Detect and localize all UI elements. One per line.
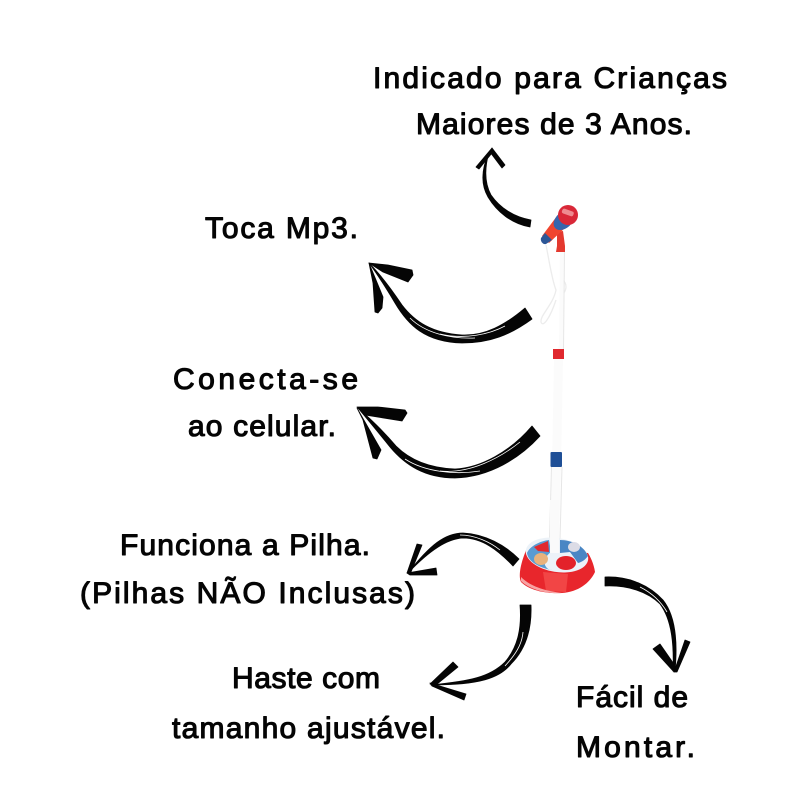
text: age recommendation: Maiores de 3 Anos.: [416, 108, 692, 141]
text: age recommendation: [373, 62, 727, 141]
microphone grip end: [541, 233, 552, 244]
text: adjustable rod: [172, 662, 445, 745]
pole band: red: [553, 349, 564, 359]
microphone body: [542, 216, 567, 243]
text: age recommendation: Indicado para Crianças: [373, 62, 727, 95]
text: connects to phone: Conecta-se: [173, 363, 358, 396]
pole: [550, 250, 564, 545]
text: connects to phone: ao celular.: [188, 410, 336, 443]
arrow: to easy assembly text: [605, 577, 690, 672]
text: easy to assemble: [576, 681, 695, 764]
arrow: to battery text: [407, 533, 519, 575]
text: adjustable rod: Haste com: [232, 662, 380, 695]
text: easy to assemble: Fácil de: [576, 681, 688, 714]
arrow: to connects to phone: [357, 407, 540, 478]
text: adjustable rod: tamanho ajustável.: [172, 712, 445, 745]
text: connects to phone: [173, 363, 358, 443]
product: microphone toy on stand: [520, 205, 595, 593]
microphone head: [550, 205, 578, 234]
text: easy to assemble: Montar.: [576, 731, 695, 764]
text: plays mp3: Toca Mp3.: [205, 212, 358, 245]
text: battery powered: (Pilhas NÃO Inclusas): [80, 576, 415, 610]
cable: [541, 245, 566, 324]
arrow: to adjustable rod text: [430, 605, 531, 700]
text: battery powered: Funciona a Pilha.: [120, 529, 370, 562]
base: [520, 500, 595, 593]
microphone holder: [556, 231, 565, 252]
pole band: navy: [550, 452, 562, 467]
text: battery powered: [80, 529, 415, 610]
arrow: microphone to age text: [476, 148, 531, 227]
arrow: to plays mp3: [369, 263, 532, 343]
